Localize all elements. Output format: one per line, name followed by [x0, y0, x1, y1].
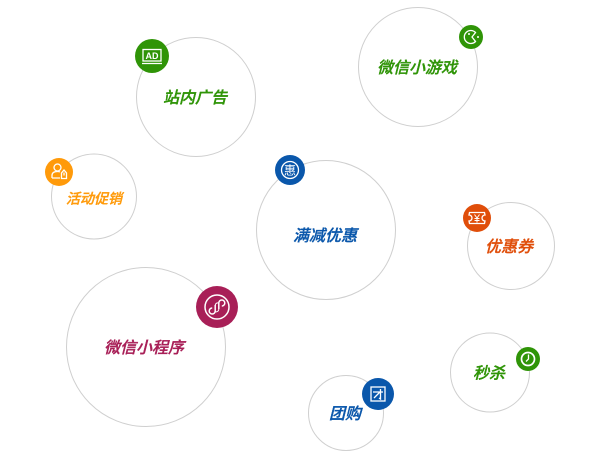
- icon: yen ticket: [463, 204, 491, 232]
- bubble: 微信小游戏: [358, 8, 483, 126]
- bubble: 微信小程序: [66, 268, 238, 426]
- icon: game character: [459, 25, 483, 49]
- bubble: 满减优惠: [256, 155, 396, 300]
- bubble: 微信小游戏: 微信小游戏: [377, 59, 459, 77]
- icon: person with tag: [45, 158, 73, 186]
- icon: mini program logo: [196, 286, 238, 328]
- bubble: 活动促销: [45, 154, 136, 239]
- bubble: 满减优惠: 满减优惠: [293, 227, 359, 245]
- bubble: 秒杀: [450, 333, 540, 412]
- icon: 惠 badge: 惠: [284, 164, 296, 178]
- bubble: 优惠券: 优惠券: [485, 238, 535, 256]
- bubble: 微信小程序: 微信小程序: [104, 339, 187, 357]
- icon: AD screen: AD: [146, 51, 159, 61]
- bubble: 活动促销: 活动促销: [66, 190, 125, 206]
- icon: 惠 badge: [275, 155, 305, 185]
- bubble: 团购: [308, 376, 394, 450]
- bubble: 秒杀: 秒杀: [473, 364, 506, 382]
- bubble: 站内广告: [135, 38, 256, 156]
- bubble: 站内广告: 站内广告: [163, 89, 229, 107]
- icon: clock: [516, 347, 540, 371]
- icon: group purchase square: [362, 378, 394, 410]
- bubble: 团购: 团购: [329, 405, 363, 423]
- bubble: 优惠券: [463, 202, 554, 290]
